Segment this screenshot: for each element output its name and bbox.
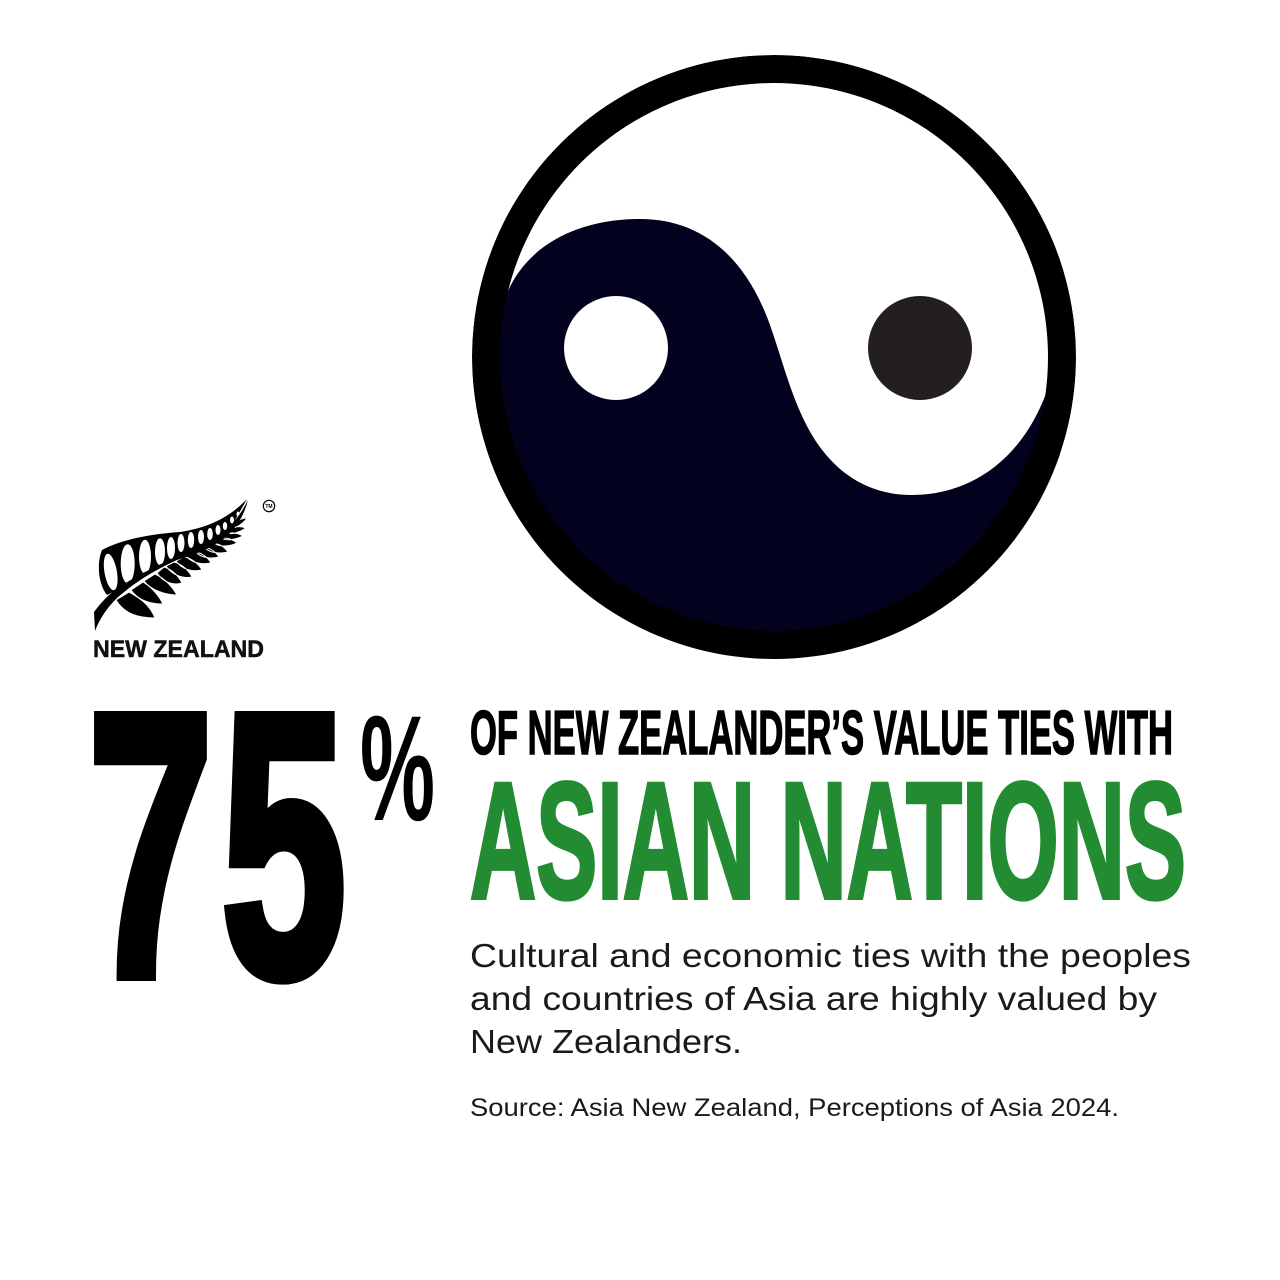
percent sign: %	[360, 684, 435, 852]
description text: and countries of Asia are highly valued by	[470, 980, 1158, 1017]
yin-yang dark swirl	[490, 219, 1060, 660]
logo wordmark: NEW ZEALAND	[93, 636, 264, 663]
icon: yin-yang circle	[440, 20, 1110, 700]
fern stem	[94, 500, 248, 631]
trademark symbol: TM	[265, 504, 273, 510]
dark dot	[868, 296, 972, 400]
fern upper frond	[99, 499, 247, 595]
icon: silver fern	[94, 499, 275, 631]
fern leaflets	[116, 518, 247, 618]
source note: Source: Asia New Zealand, Perceptions of Asia 2024.	[470, 1094, 1119, 1122]
logo: New Zealand fern	[93, 499, 275, 663]
description text	[470, 937, 1191, 1060]
big number: 75: 75	[88, 635, 346, 1055]
yin-yang outer ring	[472, 55, 1076, 659]
description text: New Zealanders.	[470, 1023, 742, 1060]
description text: Cultural and economic ties with the peoples	[470, 937, 1191, 974]
fern frond openings	[101, 512, 240, 591]
trademark symbol	[263, 500, 275, 512]
mask outside ring	[440, 20, 1110, 700]
white dot	[564, 296, 668, 400]
